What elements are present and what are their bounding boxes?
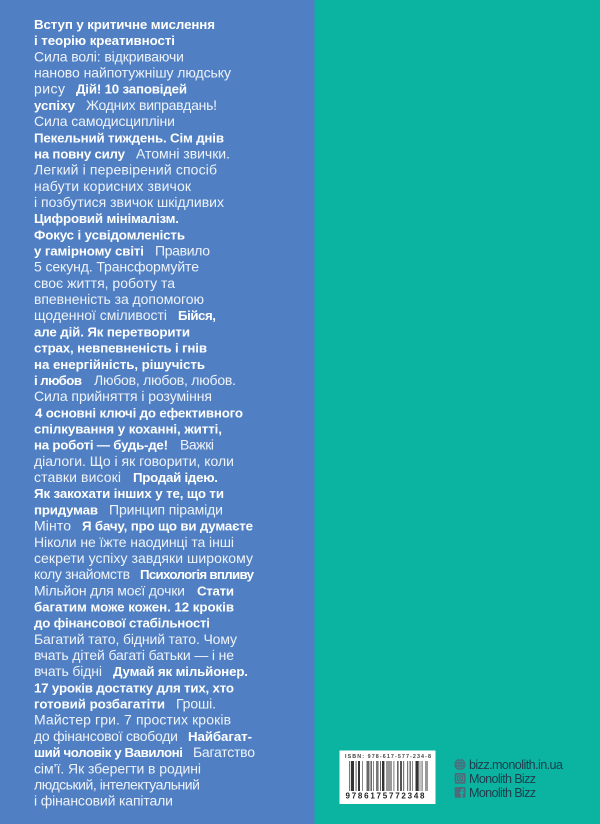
text block: list of book titles: вчать дітей багаті батьки — і не bbox=[34, 647, 234, 663]
text block: list of book titles: Ніколи не їжте наодинці та інші bbox=[34, 534, 234, 550]
text block: list of book titles: Продай ідею. bbox=[133, 470, 218, 485]
text block: list of book titles: Багатство bbox=[193, 744, 255, 760]
text block: list of book titles: щоденної сміливості bbox=[34, 307, 167, 323]
text block: list of book titles: колу знайомств bbox=[34, 566, 130, 582]
text block: list of book titles: ставки високі bbox=[34, 469, 121, 485]
text block: list of book titles: Пекельний тиждень. Сім днів bbox=[34, 130, 224, 145]
text block: list of book titles: вчать бідні bbox=[34, 663, 102, 679]
text block: list of book titles: Мінто bbox=[34, 518, 71, 534]
text block: list of book titles: Як закохати інших у те, що ти bbox=[34, 486, 224, 501]
text block: list of book titles: готовий розбагатіти bbox=[34, 697, 165, 712]
instagram handle: Monolith Bizz bbox=[469, 772, 536, 786]
text block: list of book titles: людський, інтелектуальний bbox=[34, 776, 200, 792]
icon: facebook bbox=[455, 787, 466, 798]
text block: list of book titles: на енергійність, рішучість bbox=[34, 357, 205, 372]
text block: list of book titles: Принцип піраміди bbox=[109, 501, 223, 517]
text block: list of book titles: багатим може кожен. 12 кроків bbox=[34, 600, 234, 614]
text block: list of book titles: Жодних виправдань! bbox=[86, 97, 217, 113]
barcode with ISBN bbox=[340, 750, 436, 804]
barcode with ISBN: ISBN: 978-617-577-234-8 bbox=[345, 754, 431, 760]
icon: globe bbox=[454, 759, 466, 770]
text block: list of book titles: набути корисних звичок bbox=[34, 178, 192, 194]
text block: list of book titles: спілкування у коханні, житті, bbox=[34, 422, 222, 436]
text block: list of book titles: своє життя, роботу та bbox=[34, 275, 175, 291]
text block: list of book titles: сім’ї. Як зберегти в родині bbox=[34, 760, 201, 776]
text block: list of book titles: рису bbox=[34, 81, 65, 97]
text block: list of book titles: на повну силу bbox=[34, 146, 126, 161]
text block: list of book titles: Бійся, bbox=[178, 308, 216, 323]
text block: list of book titles: Сила прийняття і розуміння bbox=[34, 388, 212, 404]
text block: list of book titles bbox=[34, 17, 255, 809]
text block: list of book titles: страх, невпевненість і гнів bbox=[34, 341, 207, 356]
text block: list of book titles: Важкі bbox=[180, 437, 214, 453]
text block: list of book titles: і позбутися звичок шкідливих bbox=[34, 194, 224, 210]
text block: list of book titles: Думай як мільйонер. bbox=[113, 664, 248, 679]
text block: list of book titles: впевненість за допомогою bbox=[34, 291, 204, 307]
text block: list of book titles: 4 основні ключі до ефективного bbox=[35, 405, 243, 420]
text block: list of book titles: діалоги. Що і як говорити, коли bbox=[34, 453, 234, 469]
icon: instagram bbox=[455, 773, 466, 784]
text block: list of book titles: у гамірному світі bbox=[34, 244, 144, 258]
text block: list of book titles: Сила самодисципліни bbox=[34, 113, 175, 129]
text block: list of book titles: Я бачу, про що ви думаєте bbox=[82, 519, 253, 534]
text block: list of book titles: Сила волі: відкриваючи bbox=[34, 48, 184, 64]
barcode with ISBN: 9786175772348 bbox=[346, 792, 425, 800]
text block: list of book titles: Гроші. bbox=[176, 696, 216, 712]
text block: list of book titles: придумав bbox=[34, 502, 98, 517]
text block: list of book titles: 17 уроків достатку для тих, хто bbox=[34, 680, 234, 695]
text block: list of book titles: Багатий тато, бідний тато. Чому bbox=[34, 631, 237, 647]
text block: list of book titles: успіху bbox=[34, 98, 76, 113]
text block: list of book titles: і фінансовий капітали bbox=[34, 793, 173, 809]
panel: teal right column bbox=[315, 0, 600, 824]
facebook handle: Monolith Bizz bbox=[469, 786, 536, 800]
text block: list of book titles: Майстер гри. 7 простих кроків bbox=[34, 712, 231, 728]
text block: list of book titles: до фінансової свободи bbox=[34, 728, 178, 744]
text block: list of book titles: Цифровий мінімалізм. bbox=[34, 211, 179, 226]
text block: list of book titles: Дій! 10 заповідей bbox=[76, 82, 187, 97]
website address: bizz.monolith.in.ua bbox=[469, 758, 563, 772]
text block: list of book titles: Психологія впливу bbox=[140, 567, 255, 582]
text block: list of book titles: Вступ у критичне мислення bbox=[34, 17, 215, 32]
text block: list of book titles: але дій. Як перетворити bbox=[34, 324, 190, 339]
text block: list of book titles: і теорію креативності bbox=[34, 33, 175, 48]
text block: list of book titles: Мільйон для моєї дочки bbox=[34, 582, 185, 598]
text block: list of book titles: Найбагат- bbox=[188, 729, 252, 744]
panel: blue left column bbox=[0, 0, 315, 824]
text block: list of book titles: ший чоловік у Вавилоні bbox=[34, 745, 183, 760]
text block: list of book titles: Стати bbox=[197, 583, 234, 598]
text block: list of book titles: секрети успіху завдяки широкому bbox=[34, 550, 253, 566]
text block: list of book titles: до фінансової стабільності bbox=[34, 616, 210, 631]
text block: list of book titles: Фокус і усвідомленість bbox=[34, 227, 185, 242]
text block: list of book titles: 5 секунд. Трансформуйте bbox=[34, 259, 199, 275]
text block: list of book titles: наново найпотужнішу людську bbox=[34, 64, 231, 80]
text block: list of book titles: на роботі — будь-де! bbox=[34, 438, 168, 453]
text block: list of book titles: Правило bbox=[155, 242, 210, 258]
text block: list of book titles: і любов bbox=[34, 373, 82, 388]
text block: list of book titles: Атомні звички. bbox=[136, 145, 230, 161]
text block: list of book titles: Легкий і перевірений спосіб bbox=[34, 162, 217, 178]
text block: list of book titles: Любов, любов, любов. bbox=[94, 372, 236, 388]
